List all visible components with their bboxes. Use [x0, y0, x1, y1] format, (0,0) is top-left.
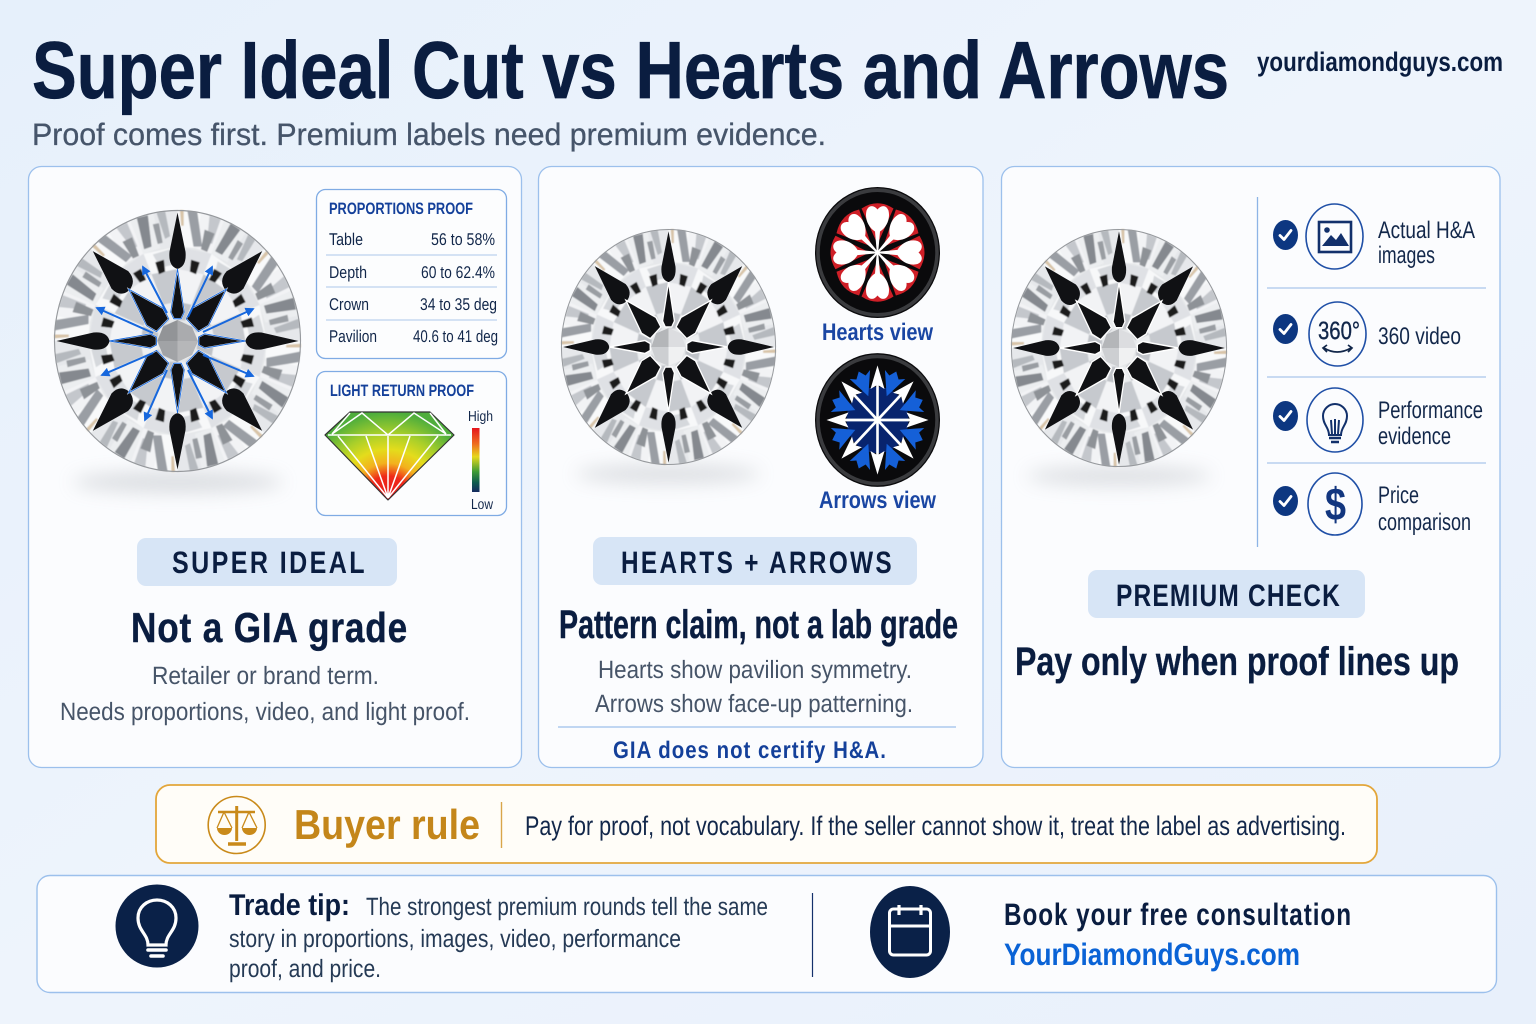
body text	[595, 656, 913, 718]
heading: pattern claim: Pattern claim, not a lab grade	[559, 603, 958, 647]
checklist: price comparison: $	[1325, 478, 1346, 530]
icon: calendar	[870, 886, 950, 978]
pill: super ideal: SUPER IDEAL	[172, 545, 367, 580]
label: buyer rule: Buyer rule	[294, 801, 480, 848]
high low scale: High	[468, 409, 493, 425]
proportions proof table: Table	[329, 230, 363, 249]
light return proof	[316, 372, 506, 516]
checklist: performance evidence	[1273, 388, 1483, 452]
pill: hearts + arrows: HEARTS + ARROWS	[621, 545, 894, 580]
pill: hearts + arrows	[593, 537, 917, 585]
arrows viewer image	[815, 353, 940, 487]
proportions proof table: PROPORTIONS PROOF	[329, 200, 473, 218]
call to action: YourDiamondGuys.com	[1004, 937, 1300, 972]
proportions proof table: Depth	[329, 263, 367, 282]
buyer rule text: Pay for proof, not vocabulary. If the seller cannot show it, treat the label as advertising.	[525, 811, 1346, 841]
banner: buyer rule	[156, 785, 1377, 863]
title: Super Ideal Cut vs Hearts and Arrows	[32, 26, 1229, 116]
pill: premium check: PREMIUM CHECK	[1116, 578, 1341, 613]
light return proof: LIGHT RETURN PROOF	[330, 382, 474, 400]
label: arrows view: Arrows view	[819, 487, 936, 514]
body text	[60, 662, 470, 726]
heading: not a GIA grade: Not a GIA grade	[131, 604, 408, 651]
panel: premium check	[1002, 166, 1500, 768]
callout: GIA does not certify: GIA does not certify H&A.	[613, 737, 887, 764]
pill: premium check	[1088, 570, 1365, 618]
trade tip text: proof, and price.	[229, 955, 381, 983]
icon: scales	[208, 796, 265, 854]
diamond	[1011, 229, 1227, 486]
high low scale	[468, 409, 493, 513]
trade tip text: The strongest premium rounds tell the same	[366, 893, 768, 921]
body text: Arrows show face-up patterning.	[595, 690, 913, 718]
proportions proof table	[316, 190, 506, 358]
body text: Hearts show pavilion symmetry.	[598, 656, 912, 684]
proportions proof table: 40.6 to 41 deg	[413, 327, 498, 346]
panel: super ideal	[28, 166, 522, 768]
checklist: 360 video	[1273, 302, 1461, 366]
checklist: performance evidence: evidence	[1378, 423, 1451, 450]
checklist: price comparison: comparison	[1378, 509, 1471, 536]
checklist: performance evidence: Performance	[1378, 397, 1483, 424]
subtitle: Proof comes first. Premium labels need premium evidence.	[32, 117, 826, 152]
proportions proof table: 56 to 58%	[431, 230, 495, 249]
checklist: price comparison	[1273, 473, 1471, 536]
call to action: Book your free consultation	[1004, 897, 1352, 932]
diamond	[561, 229, 776, 484]
high low scale: Low	[471, 497, 493, 513]
blue arrows	[97, 267, 253, 420]
trade tip text: story in proportions, images, video, performance	[229, 925, 681, 953]
call to action	[1004, 897, 1352, 972]
proportions proof table: Pavilion	[329, 327, 377, 346]
icon: light bulb	[116, 884, 198, 968]
checklist: 360 video: 360 video	[1378, 323, 1461, 350]
hearts viewer image	[815, 187, 940, 318]
label: hearts view: Hearts view	[822, 319, 933, 346]
blue star outline	[110, 269, 245, 413]
trade tip text: Trade tip:	[229, 889, 350, 922]
checklist: actual images	[1273, 204, 1475, 269]
proportions proof table: 34 to 35 deg	[420, 295, 497, 314]
body text: Retailer or brand term.	[152, 662, 379, 690]
body text: Needs proportions, video, and light proof.	[60, 698, 470, 726]
proportions proof table: Crown	[329, 295, 369, 314]
heat map diamond	[325, 412, 454, 500]
proportions proof table: 60 to 62.4%	[421, 263, 495, 282]
panel: trade tip and consultation	[37, 876, 1496, 992]
pill: super ideal	[137, 538, 397, 586]
checklist: actual images: Actual H&A	[1378, 217, 1475, 244]
diamond with blue light arrows	[54, 210, 301, 493]
panel: hearts and arrows	[538, 166, 983, 768]
checklist: actual images: images	[1378, 242, 1435, 269]
checklist: 360 video: 360°	[1318, 317, 1360, 345]
trade tip text	[229, 889, 768, 983]
checklist: price comparison: Price	[1378, 482, 1419, 509]
